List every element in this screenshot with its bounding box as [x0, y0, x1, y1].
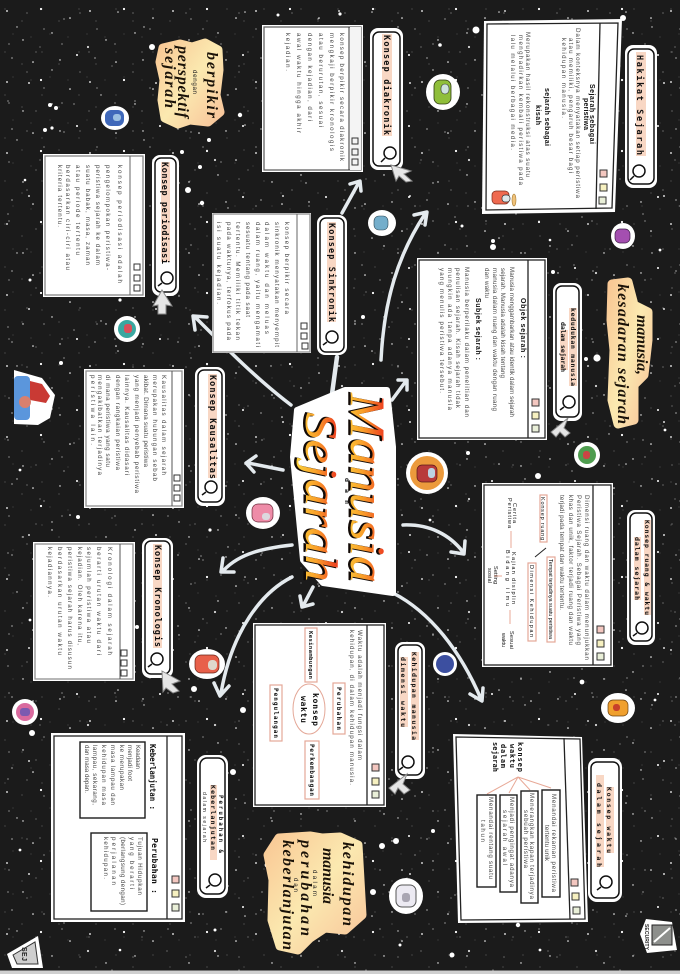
panel: Konsep waktu dalam sejarah	[453, 734, 588, 923]
panel: Perubahan dan keberlanjutan	[51, 733, 185, 922]
panel: Konsep ruang & waktu: khas dan unik, faktor terjadi ruang dan waktu	[567, 495, 574, 646]
panel: Konsep kronologis: sejumlah peristiwa atau	[85, 547, 92, 644]
search bar: Konsep diakronik	[370, 28, 412, 182]
box: perubahan	[91, 833, 147, 911]
sticker: security badge: SECURITY	[643, 924, 649, 951]
search bar: Konsep periodisasi	[152, 155, 179, 314]
box: perubahan: kehidupan.	[102, 837, 109, 879]
panel: Kedudukan manusia dalam sejarah: Subjek sejarah :	[474, 298, 481, 360]
panel: Konsep waktu dalam sejarah: dalam	[499, 744, 507, 768]
panel: Kedudukan manusia dalam sejarah: dan waktu	[483, 268, 490, 299]
search bar: Konsep waktu dalam sejarah: dalam sejarah	[595, 783, 603, 867]
sticker: teal and red crewmate	[114, 316, 140, 342]
panel: Konsep periodisasi: pengelompokan peristiwa-	[104, 165, 111, 270]
title: Manusia dan Sejarah: dan	[343, 478, 351, 504]
panel: Konsep kausalitas: dengan rangkaian peristiwa	[114, 375, 121, 471]
panel: Konsep sinkronik: konsep berpikir secara	[283, 222, 290, 315]
icon: cursor	[551, 418, 570, 437]
search bar: Konsep ruang dalam sejarah	[627, 510, 655, 645]
search bar: Kedudukan manusia dalam sejarah: kedudukan manusia	[569, 308, 577, 386]
sticker: pink crewmate	[246, 497, 280, 529]
box: perubahan: (berlangsung dengan)	[119, 837, 126, 905]
diagram: konsep ruang: Peristiwa	[506, 498, 512, 529]
search bar: Konsep ruang dalam sejarah: Konsep ruang & waktu	[643, 520, 651, 615]
box: perubahan: yang berarti	[128, 837, 135, 889]
panel: Kedudukan manusia dalam sejarah: penulisan sejarah. Kisah sejarah tidak	[454, 268, 461, 409]
panel: Konsep kronologis: berdasarkan urutan waktu	[56, 547, 63, 656]
diagram: konsep ruang: Tempat terjadinya suatu peristiwa	[547, 559, 553, 640]
search bar: Konsep kausalitas	[195, 367, 225, 506]
panel: Konsep periodisasi: suatu babak, masa, zaman	[84, 165, 91, 266]
panel: Konsep ruang & waktu	[482, 483, 613, 667]
diagram: konsep ruang: Sesuai	[508, 631, 514, 649]
diagram: konsep ruang: Kajian disiplin	[510, 552, 516, 604]
diagram: konsep ruang: Setting	[492, 566, 498, 584]
diagram: konsep waktu: konsep	[311, 693, 320, 726]
box: fungsi waktu 4: Menandai rentang suatu	[487, 797, 494, 880]
panel: Konsep kausalitas: peristiwa lain.	[89, 375, 96, 445]
search bar: Konsep kronologis: Konsep Kronologis	[152, 545, 163, 647]
panel: Perubahan dan keberlanjutan: Keberlanjutan :	[148, 744, 157, 810]
panel: Konsep kausalitas	[84, 369, 184, 508]
panel: Kedudukan manusia dalam sejarah: manusia dalam ruang dan waktu dengan ruang	[491, 268, 498, 412]
sticker: security badge	[640, 919, 677, 953]
diagram: konsep ruang: waktu	[500, 632, 506, 647]
sticker: teal crewmate	[368, 210, 396, 236]
box: fungsi waktu 1: tertentu unik	[543, 825, 550, 862]
panel: Konsep diakronik: awal waktu hingga akhir	[295, 33, 302, 133]
panel: Kehidupan manusia dimensi waktu: Waktu adalah menjadi fungsi dalam	[356, 630, 363, 760]
title: Manusia dan Sejarah	[293, 390, 396, 593]
sticker: kehidupan manusia dalam perubahan dan keberlanjutan: dalam	[311, 870, 318, 896]
panel: Kedudukan manusia dalam sejarah: yang menulis peristiwa tersebut.	[438, 268, 445, 393]
search bar: Konsep waktu dalam sejarah: Konsep waktu	[605, 787, 613, 853]
icon: cursor	[162, 671, 180, 693]
panel: Kedudukan manusia dalam sejarah: Objek sejarah :	[519, 298, 526, 358]
panel: Konsep kausalitas: lainnya. Kausalitas didasari	[123, 375, 130, 475]
title: Manusia dan Sejarah: Sejarah	[296, 412, 347, 582]
sticker: manusia, kesadaran sejarah	[611, 282, 650, 424]
title: Manusia dan Sejarah: Manusia	[340, 392, 396, 583]
panel: Konsep diakronik: kejadian.	[284, 33, 291, 71]
search bar: Kedudukan manusia dalam sejarah: dalam sejarah	[559, 322, 567, 372]
connector lines to boxes	[487, 777, 551, 794]
panel: Konsep sinkronik: sesuatu tentang pada saat	[244, 222, 251, 317]
diagram: konsep waktu: Pengulangan	[272, 688, 279, 738]
search bar: Konsep sinkronik	[317, 215, 347, 355]
panel: Hakikat Sejarah: Merupakan hasil rekonstruksi atas suatu	[524, 32, 531, 178]
panel: Kedudukan manusia dalam sejarah	[417, 258, 547, 440]
sticker: purple crewmate	[611, 223, 635, 249]
panel: Konsep kausalitas: di mana peristiwa yang satu	[104, 375, 111, 468]
search bar: Konsep sinkronik: Konsep Sinkronik	[326, 223, 337, 322]
diagram: konsep ruang: Konsep ruang	[539, 497, 545, 540]
panel: Konsep kronologis: peristiwa sejarah harus disusun	[66, 547, 73, 670]
panel: Hakikat Sejarah: menghadirkan kembali peristiwa pada	[517, 35, 524, 186]
panel: Konsep diakronik: atau berurutan, sesuai	[317, 33, 324, 127]
panel: Kedudukan manusia dalam sejarah: sejarah. Manusia adalah kisah tentang	[499, 268, 506, 379]
sticker: berpikir dengan perspektif sejarah: perspektif	[174, 44, 191, 120]
title: Manusia dan Sejarah: Manusia	[338, 392, 394, 583]
sticker: triangle warning badge: SEJ	[20, 947, 27, 961]
panel: Konsep sinkronik: pada waktunya, terfokus pada	[225, 222, 232, 341]
box: fungsi waktu 2: sebuah peristiwa	[522, 810, 529, 869]
box: keberlanjutan: Keadaan	[134, 745, 141, 770]
panel: Konsep waktu dalam sejarah: waktu	[508, 744, 516, 768]
panel: Hakikat Sejarah: peristiwa	[582, 98, 589, 130]
box: perubahan: perjalanan	[110, 837, 117, 886]
panel: Konsep periodisasi: kriteria tertentu.	[56, 165, 63, 227]
box: fungsi waktu 1: Menandai rekaman peristiwa	[550, 794, 557, 893]
panel: Konsep kausalitas: yang menjadi penyebab peristiwa	[133, 375, 140, 494]
panel: Konsep kronologis: kejadiannya.	[46, 547, 53, 597]
panel: Konsep kronologis: Kronologi dalam sejarah	[106, 547, 113, 656]
box: keberlanjutan: ke merupakan	[118, 745, 125, 791]
panel: Konsep periodisasi: peristiwa sejarah ke dalam	[94, 165, 101, 265]
search bar: Kehidupan manusia dimensi waktu: Kehidupan manusia	[410, 652, 418, 740]
search bar: Hakikat Sejarah	[625, 45, 657, 188]
panel: Perubahan dan keberlanjutan: Perubahan :	[150, 838, 159, 894]
search bar: Kedudukan manusia dalam sejarah	[551, 283, 582, 437]
sticker: white crewmate	[389, 878, 423, 914]
panel: Konsep periodisasi: berdasarkan ciri-ciri atau	[64, 165, 71, 271]
sticker: triangle warning badge	[7, 936, 43, 968]
sticker: berpikir dengan perspektif sejarah: dengan	[191, 70, 198, 95]
stickers: crewmate icons	[12, 74, 635, 914]
panel: Konsep ruang & waktu: Dimensi ruang dan waktu dalam menunjukkan	[583, 495, 590, 661]
search bar: Konsep periodisasi: Konsep periodisasi	[159, 162, 170, 264]
sticker: orange crewmate	[601, 693, 635, 723]
search bar: Perubahan dan keberlanjutan: Keberlanjutan	[209, 785, 217, 850]
search bar: Konsep kronologis	[142, 538, 180, 693]
panel: Konsep kausalitas: mengakibatkan terjadinya	[96, 375, 103, 476]
diagram: konsep ruang: sosial	[486, 568, 492, 583]
search bar: Perubahan dan keberlanjutan: dalam sejarah	[201, 792, 207, 842]
diagram: konsep ruang: Cerita	[511, 503, 517, 524]
arrows from centre title to panels	[193, 181, 483, 701]
panel: Konsep kronologis: berarti urutan waktu dari	[95, 547, 102, 655]
icon: cursor	[391, 165, 412, 182]
sticker: manusia, kesadaran sejarah: manusia,	[633, 315, 650, 375]
panel: Kedudukan manusia dalam sejarah: Manusia menggambarkan atau identik dalam sejarah	[508, 267, 515, 418]
diagram: konsep waktu: Perkembangan	[308, 744, 315, 796]
panel: Hakikat Sejarah: kehidupan manusia.	[560, 38, 567, 118]
search bar: Konsep ruang dalam sejarah: dalam sejarah	[633, 537, 641, 600]
panel: Hakikat Sejarah: atau memiliki, pengaruh besar bagi	[567, 38, 574, 173]
box: perubahan: Tujuan Hidupkan	[136, 837, 143, 896]
panel: Konsep waktu dalam sejarah: konsep	[516, 742, 524, 772]
sticker: red crewmate	[189, 649, 225, 679]
panel: Konsep kronologis	[33, 542, 135, 681]
sticker: berpikir dengan perspektif sejarah	[160, 43, 220, 124]
panel: Kedudukan manusia dalam sejarah: Manusia berperilaku dalam penelitian dan	[463, 267, 470, 418]
box: keberlanjutan: kehidupan masa	[100, 745, 107, 806]
panel: Konsep kausalitas: merupakan hubungan sebab	[151, 375, 158, 482]
diagram: konsep ruang	[486, 495, 555, 649]
sticker: navy crewmate	[433, 652, 457, 676]
search bar: Perubahan dan keberlanjutan	[197, 755, 228, 898]
sticker: kehidupan manusia dalam perubahan dan keberlanjutan	[268, 836, 362, 950]
heading: sejarah sebagai peristiwa: Sejarah sebagai	[588, 84, 595, 144]
box: fungsi waktu 2: Menerangkan kapan terjadinya	[528, 793, 535, 900]
sticker: red crewmate in orange circle	[406, 452, 448, 494]
sticker: pink and purple crewmate	[12, 699, 38, 725]
title: Manusia dan Sejarah: Sejarah	[294, 412, 345, 582]
panel: Konsep periodisasi	[43, 154, 145, 297]
sticker: kehidupan manusia dalam perubahan dan keberlanjutan: keberlanjutan	[279, 840, 296, 950]
panel: Konsep waktu dalam sejarah: sejarah	[491, 742, 499, 772]
search bar: Hakikat Sejarah: Hakikat Sejarah	[634, 55, 645, 155]
box: keberlanjutan	[80, 742, 145, 818]
sticker: kehidupan manusia dalam perubahan dan keberlanjutan: dan	[292, 878, 299, 893]
panel: Konsep sinkronik: isi suatu kejadian.	[215, 222, 222, 304]
box: fungsi waktu 1	[542, 790, 560, 897]
diagram: konsep ruang: Bidang ilmu	[504, 550, 510, 606]
box: fungsi waktu 4	[477, 795, 496, 887]
search bar: Konsep diakronik: Konsep diakronik	[381, 35, 392, 135]
panel: Konsep sinkronik: tertentu. Memiliki titik tekan	[234, 222, 241, 341]
panel: Konsep kausalitas: Kausalitas dalam sejarah	[160, 375, 167, 476]
box: keberlanjutan: dan masa depan.	[83, 745, 90, 793]
panel: Hakikat Sejarah: lalu melalui berbagai media.	[509, 35, 516, 150]
panel: Hakikat Sejarah: Dalam konteksnya menyatakan setiap peristiwa	[574, 28, 581, 199]
sticker: blue crewmate	[101, 106, 129, 130]
icon: cursor	[389, 774, 410, 794]
panel: Konsep sinkronik: sinkronik menyatakan menyempit	[273, 222, 280, 347]
panel: Konsep diakronik: dengan kejadian, dari	[306, 33, 313, 121]
panel: Konsep sinkronik	[212, 213, 311, 353]
sticker: kehidupan manusia dalam perubahan dan keberlanjutan: kehidupan	[339, 842, 356, 926]
sticker: kehidupan manusia dalam perubahan dan keberlanjutan: manusia	[319, 848, 336, 904]
sticker: manusia, kesadaran sejarah: kesadaran sejarah	[614, 284, 631, 424]
panel: Kedudukan manusia dalam sejarah: mungkin ada tanpa adanya manusia	[446, 268, 453, 411]
search bar: Konsep kausalitas: Konsep Kausalitas	[207, 375, 218, 479]
diagram: konsep waktu: Kesinambungan	[307, 631, 313, 679]
diagram: konsep ruang: Dimensi Kehidupan	[528, 565, 534, 637]
sticker: green circular crewmate	[574, 442, 600, 468]
diagram: konsep waktu	[270, 628, 345, 799]
sticker: kehidupan manusia dalam perubahan dan keberlanjutan: perubahan	[297, 838, 314, 936]
panel: Konsep ruang & waktu: terjadi pada tempat dan waktu tertentu.	[558, 495, 565, 610]
search bar: Kehidupan manusia dimensi waktu: dimensi waktu	[399, 657, 407, 727]
box: keberlanjutan: lampau, sekarang,	[91, 745, 98, 805]
panel: Hakikat Sejarah	[482, 19, 622, 214]
panel: Konsep kronologis: kejadian. Oleh karena itu,	[76, 547, 83, 645]
icon: cursor	[153, 290, 172, 314]
box: fungsi waktu 4: tahun	[479, 820, 486, 843]
sticker: green crewmate	[426, 74, 460, 110]
heading: sejarah sebagai kisah: sejarah sebagai	[543, 88, 550, 146]
panel: Konsep diakronik: konsep berpikir secara diakronik	[338, 33, 345, 162]
search bar: Perubahan dan keberlanjutan: Perubahan &	[217, 795, 223, 854]
panel: Konsep diakronik	[262, 25, 363, 172]
panel: Konsep periodisasi: konsep periodisasi adalah	[116, 165, 123, 284]
search bar: Konsep waktu dalam sejarah	[588, 758, 622, 902]
sticker: berpikir dengan perspektif sejarah: sejarah	[161, 47, 178, 108]
panel: Hakikat Sejarah: kisah	[534, 105, 541, 125]
diagram: konsep waktu: Perubahan	[335, 687, 342, 730]
box: keberlanjutan: masa lampau dan	[109, 745, 116, 806]
icon: red crewmate with note	[492, 191, 516, 206]
panel: Konsep ruang & waktu: Peristiwa Sejarah. Sebagai Peristiwa yang	[575, 495, 582, 646]
panel: Kehidupan manusia dimensi waktu	[253, 623, 386, 807]
box: keberlanjutan: menjadi foot	[126, 745, 133, 781]
sticker: large blue and red crewmate	[14, 370, 55, 425]
box: fungsi waktu 3: sejarah awal	[501, 810, 508, 865]
panel: Kehidupan manusia dimensi waktu: kehidupan, di dalam kehidupan manusia.	[348, 630, 355, 785]
sticker: berpikir dengan perspektif sejarah: berpikir	[203, 52, 220, 119]
panel: Konsep kausalitas: akibat. Dimana suatu peristiwa	[142, 375, 149, 468]
panel: Konsep sinkronik: dalam waktu dan meluas	[263, 222, 270, 334]
panel: Konsep periodisasi: atau periode tertentu	[74, 165, 81, 256]
search bar: Kehidupan manusia dimensi waktu	[389, 642, 425, 794]
diagram: konsep waktu: waktu	[299, 696, 308, 723]
box: fungsi waktu 2	[521, 791, 538, 903]
box: fungsi waktu 3	[500, 795, 517, 892]
panel: Konsep diakronik: mengkaji berpikir kronologis	[328, 33, 335, 151]
panel: Konsep sinkronik: dalam ruang, yaitu mengamati	[254, 222, 261, 347]
box: fungsi waktu 3: Menjadi pengingat adanya	[508, 797, 515, 888]
